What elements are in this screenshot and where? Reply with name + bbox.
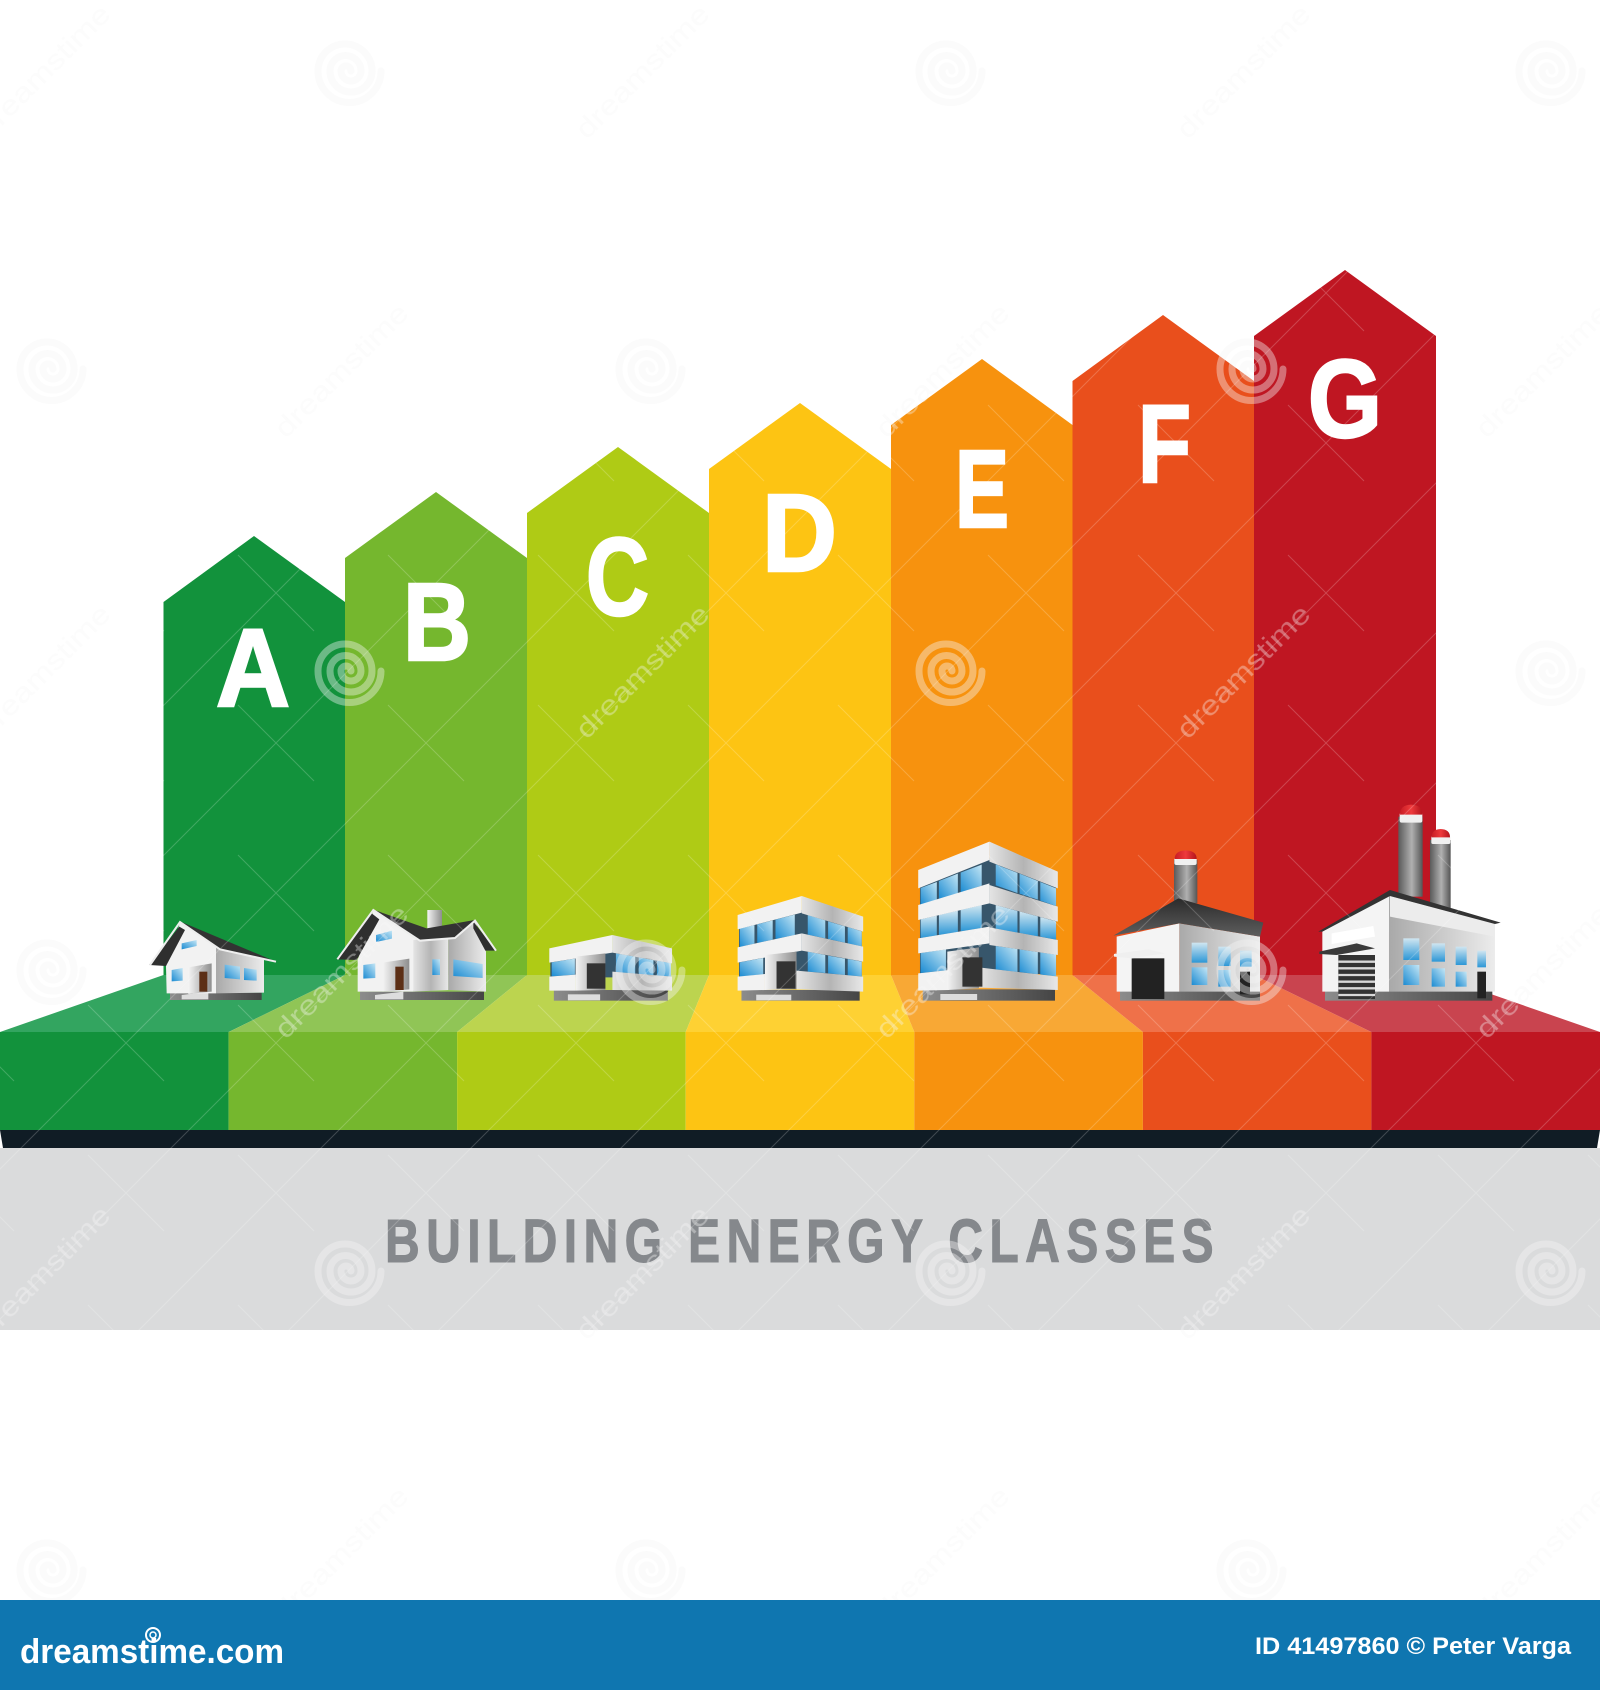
- watermark: dreamstime: [569, 1199, 715, 1345]
- letter A: A: [216, 607, 290, 730]
- watermark: dreamstime: [268, 297, 414, 443]
- heading: BUILDING ENERGY CLASSES: [385, 1207, 1220, 1275]
- watermark: dreamstime: [869, 297, 1015, 443]
- letter G: G: [1308, 338, 1382, 461]
- arrow D: [709, 403, 891, 976]
- watermark: dreamstime: [268, 898, 414, 1044]
- arrow A: [164, 536, 345, 976]
- energy class arrow chart: [164, 270, 1436, 976]
- icon: large factory (class G): [1318, 805, 1501, 1001]
- watermark: dreamstime: [268, 1480, 414, 1626]
- icon: tall office (class E): [918, 842, 1058, 1001]
- dark edge strip: [0, 1130, 1600, 1148]
- arrow B: [345, 492, 527, 976]
- letter F: F: [1138, 383, 1191, 506]
- letter E: E: [955, 428, 1009, 551]
- arrow E: [891, 359, 1072, 976]
- arrow G: [1254, 270, 1436, 976]
- watermark: dreamstime: [1170, 1199, 1316, 1345]
- letter B: B: [403, 561, 471, 684]
- arrow C: [527, 447, 709, 976]
- watermark: dreamstime: [1469, 898, 1600, 1044]
- watermark: dreamstime: [1170, 0, 1316, 144]
- image credit: ID 41497860 © Peter Varga: [1255, 1633, 1572, 1660]
- icon: small house (class A): [149, 922, 276, 1000]
- watermark: dreamstime: [1469, 1480, 1600, 1626]
- watermark: dreamstime: [569, 0, 715, 144]
- grey title panel: [0, 1148, 1600, 1330]
- icon: low office (class C): [549, 935, 672, 1001]
- icon: mid office (class D): [738, 896, 863, 1001]
- arrow F: [1072, 315, 1254, 976]
- watermark: dreamstime: [1469, 297, 1600, 443]
- footer bar: [0, 1600, 1600, 1690]
- watermark: dreamstime: [569, 598, 715, 744]
- icon: family house (class B): [337, 910, 496, 1000]
- icon: logo spiral: [146, 1628, 160, 1642]
- perspective floor band: [0, 975, 1600, 1032]
- watermark: dreamstime: [869, 1480, 1015, 1626]
- watermark: dreamstime: [869, 898, 1015, 1044]
- letter D: D: [762, 472, 837, 595]
- icon: small factory (class F): [1113, 850, 1263, 1001]
- letter C: C: [586, 516, 649, 639]
- watermark: dreamstime: [1170, 598, 1316, 744]
- front colour strip: [0, 1032, 1600, 1130]
- footer logo: dreamstime.com: [20, 1633, 284, 1671]
